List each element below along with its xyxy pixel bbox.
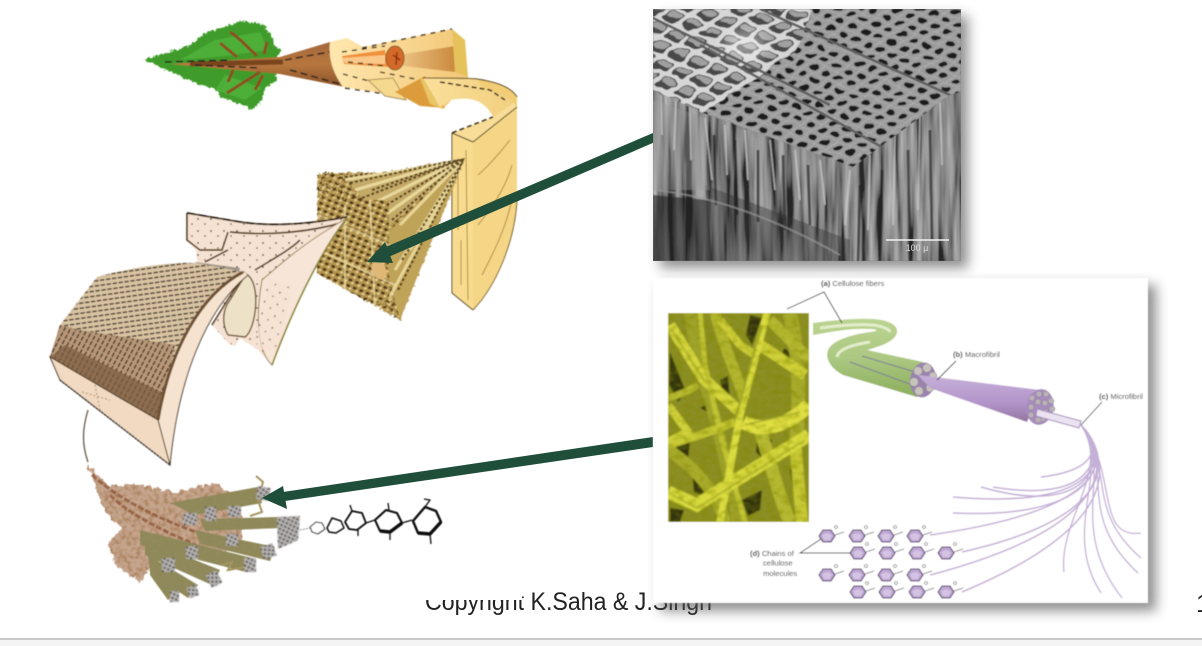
- image edge covering top of copyright text: [420, 570, 522, 600]
- panel: wood micrograph: [640, 0, 970, 261]
- cellulose molecule chain: [300, 499, 441, 544]
- arrow: fibril to cellulose panel: [262, 437, 653, 509]
- fibril bundle: [85, 462, 300, 602]
- panel: cellulose structure: [653, 278, 1148, 603]
- footer bar: [0, 638, 1202, 646]
- microfibril tube: [1036, 409, 1081, 428]
- label: cellulose fibers: (a) Cellulose fibers: [821, 279, 885, 288]
- copyright text: Copyright K.Saha & J.Singh: [425, 588, 712, 616]
- label: chains of cellulose molecules: cellulose: [763, 558, 793, 568]
- green cellulose fiber: [813, 319, 938, 399]
- cell wall lamella: [187, 213, 347, 365]
- scale bar: 100 μ: [906, 243, 928, 253]
- leader lines: [787, 292, 1102, 553]
- layered wall block: [50, 263, 248, 465]
- chains of cellulose molecules: [819, 526, 963, 598]
- label: chains of cellulose molecules: molecules: [763, 569, 797, 578]
- arrow: block to micrograph: [367, 133, 655, 263]
- purple macrofibril: [918, 375, 1056, 427]
- cut branch: [330, 29, 470, 109]
- cellulose strands: [930, 425, 1141, 598]
- label: macrofibril: (b) Macrofibril: [953, 350, 1000, 359]
- yellow fiber micrograph: [668, 313, 810, 522]
- icon: leaf: [144, 21, 345, 110]
- wood hierarchy illustration: [50, 21, 517, 602]
- label: chains of cellulose molecules: (d) Chains of: [750, 549, 794, 558]
- curved wood board: [423, 78, 517, 310]
- shadow: micrograph: [660, 16, 968, 268]
- scale bar: [886, 240, 949, 253]
- connecting thread: [84, 410, 88, 462]
- cell block cross section: [317, 158, 465, 320]
- shadow: cellulose panel: [660, 285, 1156, 611]
- label: microfibril: (c) Microfibril: [1099, 392, 1143, 401]
